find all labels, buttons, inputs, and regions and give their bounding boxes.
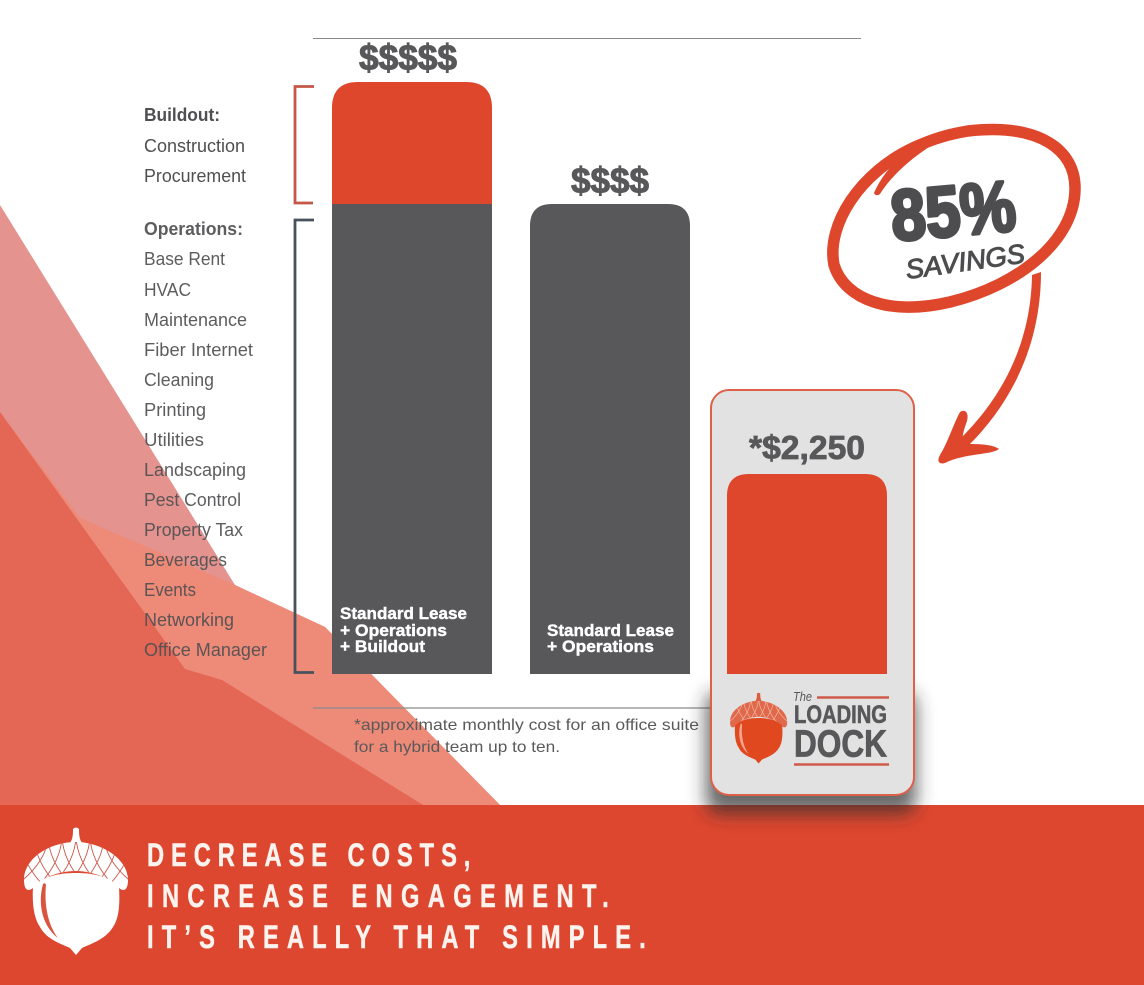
bracket: operations bbox=[295, 220, 314, 672]
logo: the loading dock bbox=[727, 689, 889, 766]
tagline: INCREASE ENGAGEMENT. bbox=[147, 879, 609, 914]
footnote rule bbox=[313, 707, 712, 709]
callout: hand-drawn circle bbox=[833, 130, 1075, 307]
operations cost list: Beverages bbox=[144, 550, 227, 570]
bottom banner bbox=[0, 805, 1144, 985]
tagline: DECREASE COSTS, bbox=[147, 838, 470, 873]
bar: standard lease + operations + buildout: $$$$$ bbox=[359, 37, 457, 78]
bar: standard lease + operations + buildout: Standard Lease bbox=[340, 604, 467, 623]
heading: buildout cost list: Procurement bbox=[144, 166, 246, 186]
heading: buildout cost list: Buildout: bbox=[144, 105, 220, 125]
logo: the loading dock: DOCK bbox=[794, 724, 887, 766]
card shadow bbox=[706, 692, 916, 814]
bar: standard lease + operations: + Operations bbox=[547, 637, 654, 656]
bar: standard lease + operations: $$$$ bbox=[571, 160, 649, 201]
operations cost list: Property Tax bbox=[144, 520, 243, 540]
panel: the loading dock card: *$2,250 bbox=[749, 429, 865, 466]
operations cost list: HVAC bbox=[144, 280, 191, 300]
bar: the loading dock bbox=[727, 474, 887, 674]
footnote: *approximate monthly cost for an office suite bbox=[354, 717, 699, 734]
bar: standard lease + operations + buildout bbox=[332, 37, 492, 674]
heading: buildout cost list bbox=[144, 105, 246, 186]
operations cost list: Utilities bbox=[144, 430, 204, 450]
bracket: buildout bbox=[295, 86, 314, 203]
operations cost list: Operations: bbox=[144, 219, 243, 239]
arrow: savings to card bbox=[938, 272, 1041, 463]
operations cost list: Printing bbox=[144, 400, 206, 420]
tagline bbox=[147, 838, 646, 955]
footnote bbox=[354, 717, 699, 756]
background: layered salmon shapes bbox=[0, 205, 500, 805]
footnote: for a hybrid team up to ten. bbox=[354, 739, 560, 756]
operations cost list: Landscaping bbox=[144, 460, 246, 480]
tagline: IT’S REALLY THAT SIMPLE. bbox=[147, 920, 646, 955]
operations cost list: Cleaning bbox=[144, 370, 214, 390]
bar: standard lease + operations + buildout: + Operations bbox=[340, 621, 447, 640]
heading: buildout cost list: Construction bbox=[144, 136, 245, 156]
bar: standard lease + operations bbox=[530, 160, 690, 674]
callout text: 85% savings: 85% bbox=[887, 166, 1019, 257]
bar: standard lease + operations + buildout: + Buildout bbox=[340, 637, 425, 656]
operations cost list: Fiber Internet bbox=[144, 340, 253, 360]
operations cost list bbox=[144, 219, 267, 660]
operations cost list: Pest Control bbox=[144, 490, 241, 510]
callout text: 85% savings: SAVINGS bbox=[904, 239, 1027, 285]
operations cost list: Networking bbox=[144, 610, 234, 630]
top rule bbox=[313, 38, 861, 40]
logo: the loading dock: LOADING bbox=[794, 701, 887, 729]
panel: the loading dock card bbox=[711, 390, 914, 795]
logo: the loading dock: The bbox=[793, 689, 812, 704]
operations cost list: Office Manager bbox=[144, 640, 267, 660]
operations cost list: Maintenance bbox=[144, 310, 247, 330]
operations cost list: Base Rent bbox=[144, 249, 225, 269]
bar: standard lease + operations: Standard Lease bbox=[547, 621, 674, 640]
operations cost list: Events bbox=[144, 580, 196, 600]
icon: banner acorn bbox=[18, 828, 134, 955]
